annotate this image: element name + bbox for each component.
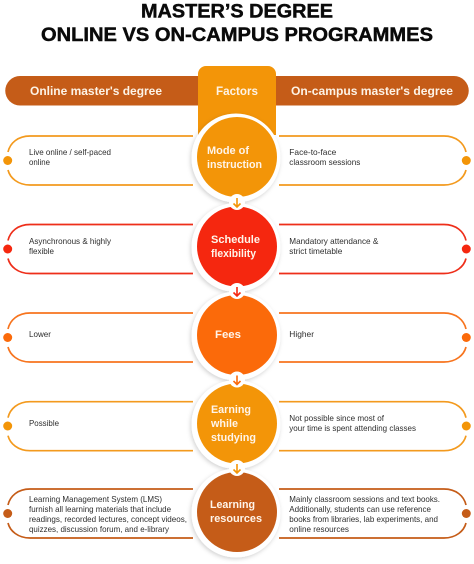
title [41, 2, 433, 46]
arrow: earning while studying to learning resources [229, 460, 245, 476]
header bar: online master's degree [5, 76, 200, 106]
row 2: right panel, on-campus schedule flexibility: strict timetable [289, 247, 343, 256]
row 5: right panel, on-campus learning resources: books from libraries, lab experiments, and [289, 515, 438, 524]
header bar: on-campus master's degree [274, 76, 469, 106]
title: MASTER’S DEGREE [141, 2, 333, 22]
row 5: left panel, online learning resources [3, 489, 193, 538]
factor circle: fees: Fees [215, 329, 241, 341]
factor circle: learning resources: Learning [210, 499, 255, 511]
factor circle: schedule flexibility [192, 203, 280, 292]
row 5: left panel, online learning resources: Learning Management System (LMS) [29, 495, 162, 504]
factor circle: earning while studying: Earning [211, 404, 251, 416]
factor circle: schedule flexibility: Schedule [211, 234, 260, 246]
row 1: left panel, online mode of instruction: online [29, 158, 50, 167]
row 5: left panel, online learning resources: quizzes, discussion forum, and e-library [29, 525, 170, 534]
row 3: left panel, online fees: Lower [29, 330, 51, 339]
row 5: right panel, on-campus learning resources: Mainly classroom sessions and text books. [289, 495, 440, 504]
row 1: right panel, on-campus mode of instruction: classroom sessions [289, 158, 360, 167]
factor circle: fees [192, 292, 280, 380]
row 3: left panel, online fees [3, 313, 193, 362]
row 4: left panel, online earning while studying [3, 402, 193, 451]
header tab: factors [198, 66, 276, 135]
row 5: left panel, online learning resources: readings, recorded lectures, concept videos, [29, 515, 187, 524]
factor circle: learning resources: resources [210, 513, 262, 525]
row 5: right panel, on-campus learning resources: online resources [289, 525, 349, 534]
row 5: left panel, online learning resources: furnish all learning materials that include [29, 505, 171, 514]
factor circle: mode of instruction: Mode of [207, 145, 249, 157]
row 5: right panel, on-campus learning resources [279, 489, 471, 538]
row 4: right panel, on-campus earning while studying: Not possible since most of [289, 414, 385, 423]
factor circle: mode of instruction [192, 114, 280, 202]
header tab: factors: Factors [216, 84, 258, 98]
row 3: right panel, on-campus fees: Higher [289, 330, 314, 339]
row 1: right panel, on-campus mode of instruction [279, 136, 471, 185]
row 1: left panel, online mode of instruction: Live online / self-paced [29, 148, 111, 157]
arrow: mode of instruction to schedule flexibility [229, 194, 245, 210]
factor circle: earning while studying [192, 380, 280, 469]
title: ONLINE VS ON-CAMPUS PROGRAMMES [41, 25, 433, 46]
row 2: left panel, online schedule flexibility [3, 224, 193, 274]
row 4: right panel, on-campus earning while studying: your time is spent attending classes [289, 424, 416, 433]
header bar: on-campus master's degree: On-campus master's degree [291, 84, 453, 98]
row 2: right panel, on-campus schedule flexibility: Mandatory attendance & [289, 237, 379, 246]
header bar: online master's degree: Online master's degree [30, 84, 162, 98]
row 5: right panel, on-campus learning resources: Additionally, students can use reference [289, 505, 431, 514]
factor circle: schedule flexibility: flexibility [211, 248, 257, 260]
row 4: left panel, online earning while studying: Possible [29, 419, 59, 428]
row 3: right panel, on-campus fees [279, 313, 471, 362]
row 1: left panel, online mode of instruction [3, 136, 193, 185]
row 2: left panel, online schedule flexibility: Asynchronous & highly [29, 237, 112, 246]
row 2: right panel, on-campus schedule flexibility [279, 224, 471, 274]
factor circle: earning while studying: studying [211, 432, 256, 444]
row 1: right panel, on-campus mode of instruction: Face-to-face [289, 148, 337, 157]
factor circle: learning resources [192, 468, 280, 558]
row 4: right panel, on-campus earning while studying [279, 402, 471, 451]
row 2: left panel, online schedule flexibility: flexible [29, 247, 54, 256]
factor circle: mode of instruction: instruction [207, 159, 262, 171]
arrow: fees to earning while studying [229, 372, 245, 388]
factor circle: earning while studying: while [210, 418, 238, 430]
arrow: schedule flexibility to fees [229, 283, 245, 299]
